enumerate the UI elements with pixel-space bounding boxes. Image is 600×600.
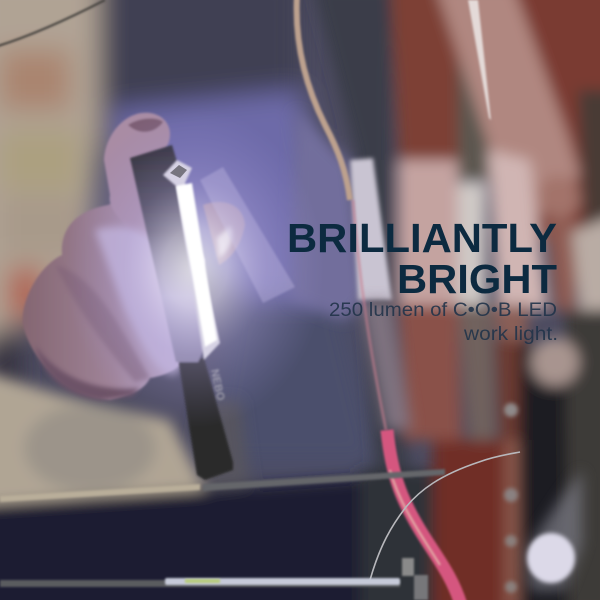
subheading <box>329 300 558 345</box>
striped reflection block <box>200 167 295 303</box>
headline <box>287 215 557 302</box>
headline: BRIGHT <box>397 256 557 302</box>
headline: BRILLIANTLY <box>287 215 557 261</box>
pink diagonal reflection <box>435 0 580 215</box>
lit finger area <box>95 227 198 375</box>
dark vertical band <box>312 0 410 470</box>
grey wire <box>370 452 520 580</box>
light glow <box>65 108 325 428</box>
pale light bands <box>398 160 458 310</box>
LED strip <box>163 160 220 360</box>
finger shadow <box>55 265 150 382</box>
curved wire at top left <box>0 0 105 46</box>
beige and pink cable <box>297 0 461 600</box>
illuminated hand <box>23 113 205 400</box>
work light <box>130 145 233 480</box>
logo on handle: NEBO <box>208 368 227 402</box>
red vertical bands <box>390 0 462 170</box>
forearm and sleeve <box>0 370 205 510</box>
far finger behind beam <box>203 202 245 265</box>
lower rail with reflected beam <box>0 558 428 600</box>
cloudy white streak in upper right <box>468 0 491 120</box>
thumbnail <box>128 119 163 132</box>
lower panel <box>0 478 365 600</box>
pale bokeh strip <box>350 158 412 430</box>
torch handle <box>178 358 233 480</box>
lower finger shadow <box>35 345 140 400</box>
torch body <box>130 145 206 362</box>
subheading: 250 lumen of C•O•B LED <box>329 300 557 321</box>
subheading: work light. <box>463 324 558 345</box>
beige panel edge <box>0 484 200 502</box>
lower reds and darks <box>398 305 462 440</box>
lavender wall left of the cable <box>290 110 365 320</box>
mid rail <box>203 469 445 491</box>
palm and knuckles <box>23 180 205 400</box>
bokeh circles <box>504 403 582 593</box>
thumb <box>104 113 178 260</box>
